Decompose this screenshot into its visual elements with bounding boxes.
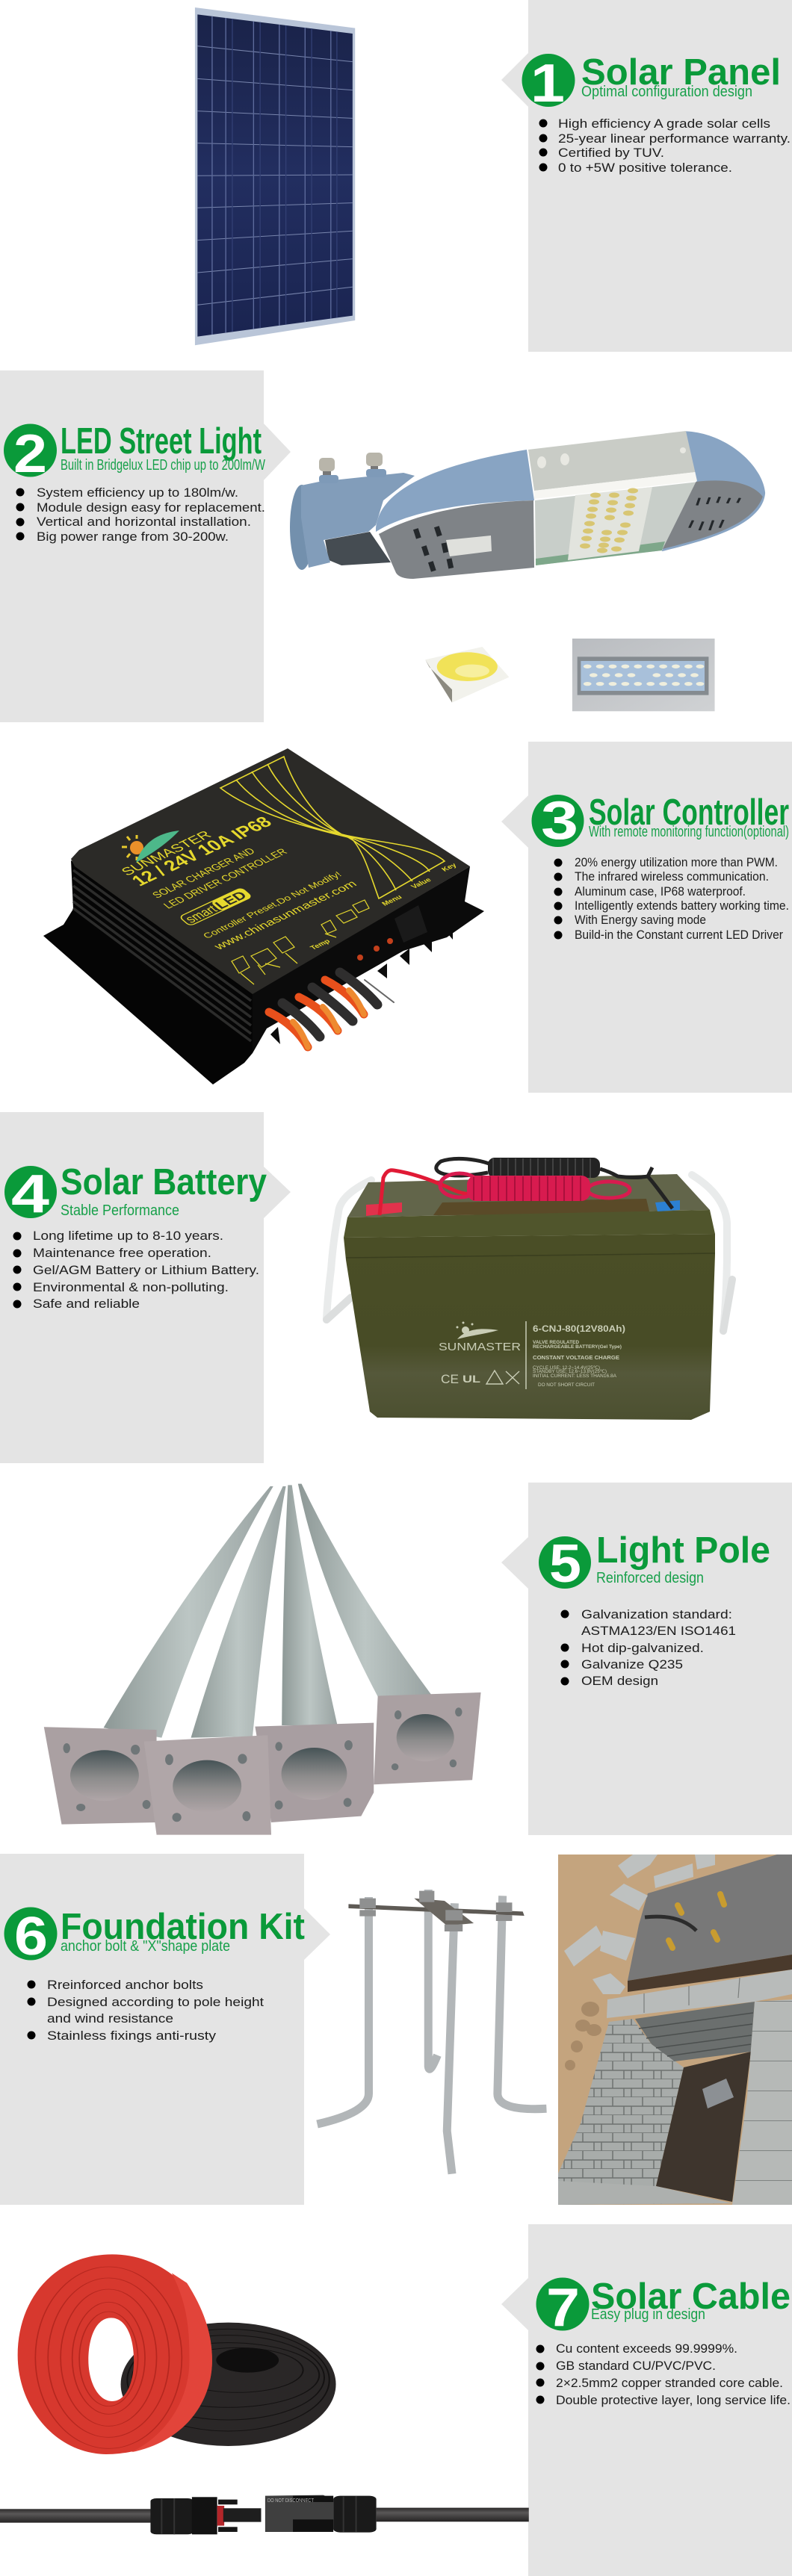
number badge 5: 5 bbox=[549, 1534, 581, 1594]
heading: Foundation Kit: Foundation Kit bbox=[61, 1907, 305, 1947]
image: solar charge controller: Temp bbox=[309, 938, 332, 952]
feature list bbox=[13, 1229, 259, 1311]
number badge 4 bbox=[4, 1164, 57, 1224]
number badge 7: 7 bbox=[546, 2278, 580, 2338]
panel: solar cable section bbox=[0, 2224, 792, 2576]
feature list bbox=[536, 2342, 791, 2407]
feature list: Environmental & non-polluting. bbox=[33, 1281, 229, 1294]
grey text panel with arrow bbox=[501, 2224, 792, 2576]
heading: Solar Battery: Solar Battery bbox=[61, 1162, 267, 1202]
image: foundation pit photo bbox=[558, 1855, 792, 2205]
feature list: Rreinforced anchor bolts bbox=[47, 1978, 203, 1992]
feature list: 25-year linear performance warranty. bbox=[558, 132, 791, 146]
feature list: Stainless fixings anti-rusty bbox=[47, 2029, 217, 2043]
image: cable with MC4 connector bbox=[0, 2495, 529, 2534]
image: cable coils bbox=[18, 2254, 336, 2454]
grey text panel with arrow bbox=[0, 1112, 291, 1463]
image: solar charge controller: www.chinasunmaster.com bbox=[211, 879, 359, 952]
image: battery: CONSTANT VOLTAGE CHARGE bbox=[533, 1356, 619, 1361]
image: battery: DO NOT SHORT CIRCUIT bbox=[538, 1383, 595, 1388]
feature list: Cu content exceeds 99.9999%. bbox=[556, 2342, 737, 2356]
number badge 7 bbox=[536, 2278, 589, 2338]
panel: foundation kit section bbox=[0, 1854, 792, 2205]
image: battery: RECHARGEABLE BATTERY(Gel Type) bbox=[533, 1345, 622, 1350]
image: solar charge controller: 12 / 24V 10A IP68 bbox=[128, 813, 276, 890]
subheading: anchor bolt & "X"shape plate bbox=[61, 1938, 230, 1955]
feature list: Hot dip-galvanized. bbox=[581, 1642, 704, 1655]
grey text panel with arrow bbox=[501, 742, 792, 1093]
feature list bbox=[560, 1608, 736, 1688]
image: solar charge controller: LED DRIVER CONTROLLER bbox=[161, 847, 290, 911]
grey text panel with arrow bbox=[0, 370, 291, 722]
grey text panel with arrow bbox=[501, 1483, 792, 1835]
heading: Light Pole: Light Pole bbox=[596, 1530, 770, 1571]
number badge 1: 1 bbox=[530, 54, 565, 114]
image: LED module bbox=[572, 639, 715, 711]
feature list: Big power range from 30-200w. bbox=[37, 530, 229, 544]
panel: solar battery section bbox=[0, 1112, 732, 1463]
image: solar panel bbox=[195, 7, 355, 345]
feature list: Vertical and horizontal installation. bbox=[37, 515, 251, 529]
heading: Solar Panel: Solar Panel bbox=[581, 52, 781, 93]
feature list bbox=[16, 486, 265, 544]
image: battery: 6-CNJ-80(12V80Ah) bbox=[533, 1323, 625, 1334]
image: battery: UL bbox=[462, 1373, 481, 1385]
image: four light poles bbox=[44, 1484, 481, 1835]
image: solar charge controller: smart bbox=[182, 902, 220, 925]
feature list bbox=[539, 117, 791, 175]
feature list: and wind resistance bbox=[47, 2012, 173, 2026]
image: solar charge controller: Controller Preset,Do Not Modify! bbox=[201, 870, 344, 940]
black cable coil bbox=[436, 1158, 672, 1208]
number badge 6: 6 bbox=[14, 1907, 48, 1967]
image: solar charge controller: SOLAR CHARGER AND bbox=[150, 846, 258, 901]
feature list bbox=[554, 856, 789, 942]
subheading: Reinforced design bbox=[596, 1570, 704, 1586]
red cable coil bbox=[380, 1170, 630, 1215]
feature list: Gel/AGM Battery or Lithium Battery. bbox=[33, 1264, 259, 1277]
panel: LED street light section bbox=[0, 370, 765, 722]
number badge 4: 4 bbox=[11, 1164, 49, 1224]
image: battery: STANDBY USE: 12.6~13.8V(25℃) bbox=[533, 1370, 607, 1374]
number badge 2: 2 bbox=[13, 424, 47, 484]
feature list: Double protective layer, long service life. bbox=[556, 2394, 791, 2407]
image: battery: SUNMASTER bbox=[439, 1341, 521, 1353]
feature list: Aluminum case, IP68 waterproof. bbox=[575, 885, 746, 899]
image: LED street lamp bbox=[290, 431, 765, 579]
subheading: Easy plug in design bbox=[591, 2306, 705, 2323]
feature list: High efficiency A grade solar cells bbox=[558, 117, 770, 131]
feature list: 0 to +5W positive tolerance. bbox=[558, 161, 732, 175]
image: battery: CE bbox=[441, 1372, 459, 1386]
number badge 1 bbox=[522, 54, 575, 114]
feature list: 20% energy utilization more than PWM. bbox=[575, 856, 778, 869]
grey text panel with arrow bbox=[0, 1854, 330, 2205]
feature list: 2×2.5mm2 copper stranded core cable. bbox=[556, 2377, 783, 2390]
image: battery: INITIAL CURRENT: LESS THAN16.8A bbox=[533, 1374, 616, 1379]
feature list: Build-in the Constant current LED Driver bbox=[575, 928, 783, 942]
image: battery: CYCLE USE: 12.2~14.4V(25℃) bbox=[533, 1366, 600, 1371]
image: solar charge controller: Value bbox=[409, 877, 433, 890]
feature list: OEM design bbox=[581, 1675, 658, 1688]
image: LED chip bbox=[425, 647, 509, 703]
battery logo bbox=[456, 1322, 498, 1339]
feature list: GB standard CU/PVC/PVC. bbox=[556, 2359, 716, 2373]
feature list: Galvanize Q235 bbox=[581, 1658, 683, 1672]
grey text panel with arrow bbox=[501, 0, 792, 352]
image: solar charge controller: LED bbox=[211, 889, 250, 911]
feature list: Designed according to pole height bbox=[47, 1996, 264, 2009]
image: solar charge controller: Key bbox=[440, 862, 459, 873]
subheading: Optimal configuration design bbox=[581, 84, 752, 100]
heading: Solar Cable: Solar Cable bbox=[591, 2276, 791, 2317]
feature list: The infrared wireless communication. bbox=[575, 870, 769, 884]
image: solar charge controller: Menu bbox=[380, 894, 404, 907]
panel: solar panel section bbox=[195, 0, 792, 352]
feature list: Long lifetime up to 8-10 years. bbox=[33, 1229, 223, 1243]
feature list: Certified by TUV. bbox=[558, 146, 664, 160]
image: solar charge controller bbox=[43, 748, 484, 1084]
heading: LED Street Light: LED Street Light bbox=[61, 421, 262, 462]
feature list: ASTMA123/EN ISO1461 bbox=[581, 1624, 736, 1638]
controller logo bbox=[122, 831, 179, 863]
feature list: Safe and reliable bbox=[33, 1297, 140, 1311]
number badge 3 bbox=[532, 791, 584, 851]
feature list: With Energy saving mode bbox=[575, 913, 706, 927]
feature list bbox=[27, 1978, 264, 2043]
feature list: Galvanization standard: bbox=[581, 1608, 732, 1621]
number badge 3: 3 bbox=[541, 791, 578, 851]
image: anchor bolts bbox=[318, 1890, 546, 2174]
subheading: Built in Bridgelux LED chip up to 200lm/W bbox=[61, 457, 265, 474]
subheading: Stable Performance bbox=[61, 1202, 179, 1219]
panel: light pole section bbox=[44, 1483, 792, 1835]
feature list: System efficiency up to 180lm/w. bbox=[37, 486, 238, 500]
number badge 5 bbox=[539, 1534, 591, 1594]
connector markings: DO NOT DISCONNECT bbox=[267, 2498, 315, 2504]
feature list: Maintenance free operation. bbox=[33, 1247, 211, 1260]
feature list: Module design easy for replacement. bbox=[37, 501, 265, 515]
panel: solar controller section bbox=[43, 742, 792, 1093]
number badge 2 bbox=[4, 424, 57, 484]
image: solar charge controller: SUNMASTER bbox=[117, 828, 214, 878]
image: battery: VALVE REGULATED bbox=[533, 1341, 580, 1345]
number badge 6 bbox=[4, 1907, 57, 1967]
image: battery bbox=[327, 1158, 732, 1420]
